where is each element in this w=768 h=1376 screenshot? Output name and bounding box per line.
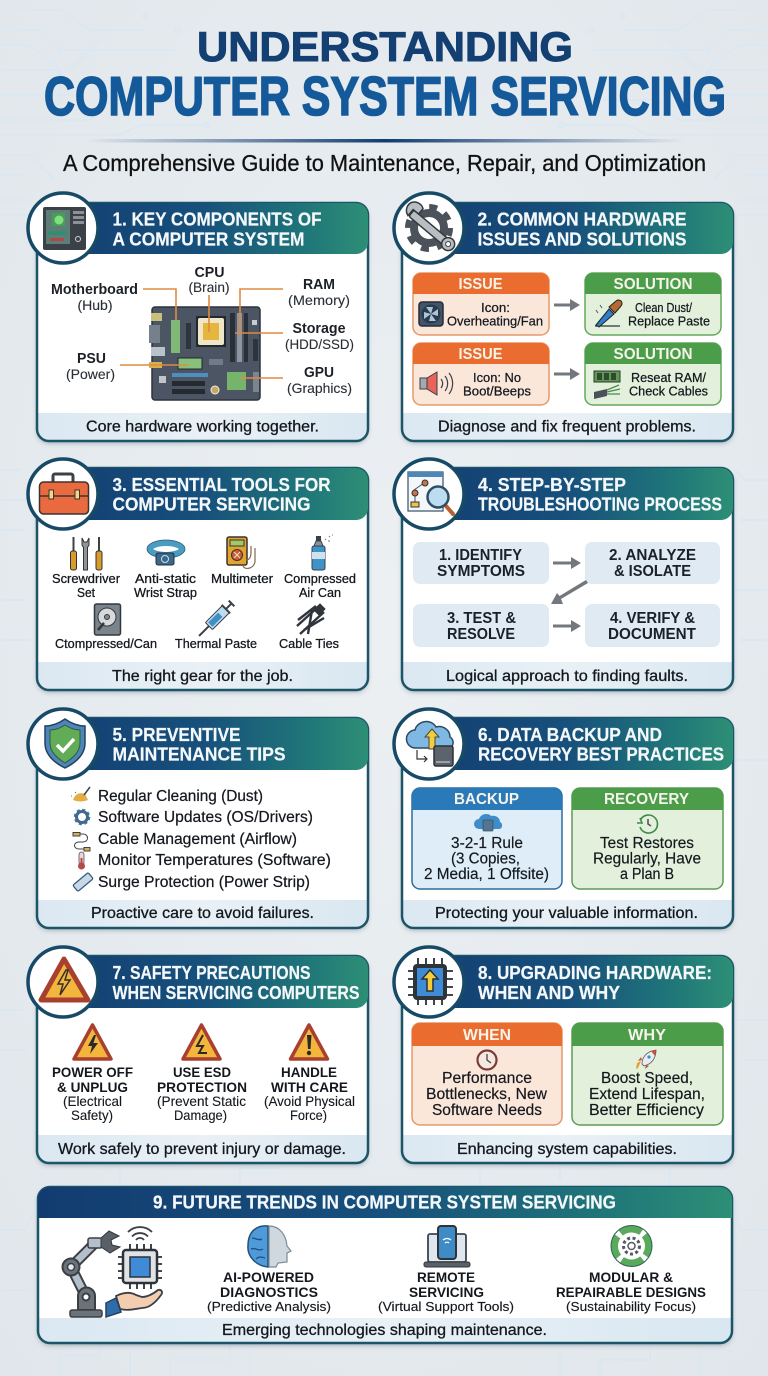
tool: hard drive: Ctompressed/Can (55, 637, 157, 651)
when box: Bottlenecks, New (426, 1086, 548, 1103)
component labels (51, 265, 354, 396)
icon: cloud and drive (394, 709, 464, 779)
why box: WHY (628, 1027, 666, 1044)
step 2 (585, 542, 720, 584)
safety 3 (264, 1025, 355, 1123)
header 4 (402, 468, 733, 520)
backup box: (3 Copies, (451, 850, 520, 868)
icon: broom (71, 787, 90, 802)
subtitle: A Comprehensive Guide to Maintenance, Repair, and Optimization (63, 150, 706, 176)
step 1 (413, 542, 549, 584)
header 2: ISSUES AND SOLUTIONS (478, 230, 686, 250)
chip (118, 1244, 162, 1289)
footer 3: The right gear for the job. (112, 668, 293, 685)
trend: modular designs (556, 1222, 706, 1314)
panel 7: safety (28, 947, 368, 1163)
backup box (412, 788, 562, 889)
arrow (551, 580, 588, 604)
icon: computer tower (28, 193, 98, 263)
recovery box: RECOVERY (604, 791, 689, 808)
recovery box: Test Restores (600, 835, 694, 852)
header 9 (38, 1187, 732, 1218)
trend: AI diagnostics: DIAGNOSTICS (220, 1285, 318, 1300)
trend: modular designs: MODULAR & (589, 1270, 673, 1285)
issue 1: ISSUE (458, 276, 503, 293)
component labels: RAM (303, 277, 335, 293)
tool: screwdrivers (52, 537, 120, 600)
trend: remote servicing: REMOTE (417, 1270, 475, 1285)
header 4: TROUBLESHOOTING PROCESS (478, 494, 722, 514)
title (44, 23, 726, 127)
when box: Performance (442, 1070, 532, 1087)
tool: thermal paste syringe: Thermal Paste (175, 637, 257, 651)
issue 1: Overheating/Fan (447, 314, 543, 328)
tip list: Surge Protection (Power Strip) (98, 874, 310, 891)
safety 2: (Prevent Static (157, 1093, 246, 1109)
panel 5: preventive maintenance (28, 709, 368, 928)
header 2: 2. COMMON HARDWARE (478, 210, 686, 230)
tip list: Monitor Temperatures (Software) (98, 852, 331, 869)
safety 1: & UNPLUG (57, 1079, 128, 1095)
wifi arcs (128, 1227, 152, 1240)
component labels: (Brain) (188, 279, 230, 295)
icon: RAM and cable (594, 371, 620, 399)
header 4: 4. STEP-BY-STEP (478, 475, 626, 495)
trend: modular designs: (Sustainability Focus) (566, 1299, 696, 1314)
panel 4: troubleshooting (394, 459, 733, 690)
icon: rocket (636, 1050, 656, 1069)
icon: cloud (474, 814, 502, 831)
tool: wrist strap: Anti-static (135, 572, 196, 586)
icon: speaker (420, 372, 453, 395)
solution 1: Replace Paste (628, 314, 710, 328)
safety 2: USE ESD (173, 1064, 231, 1080)
header 3: 3. ESSENTIAL TOOLS FOR (112, 475, 330, 495)
tool: air can: Compressed (284, 572, 356, 586)
header 5 (37, 718, 368, 770)
recovery box: Regularly, Have (593, 850, 701, 868)
header 9: 9. FUTURE TRENDS IN COMPUTER SYSTEM SERVICING (153, 1192, 616, 1212)
trend: AI diagnostics (207, 1226, 331, 1314)
component labels: CPU (194, 265, 224, 281)
issue 2: Icon: No (473, 370, 521, 385)
step 3: RESOLVE (447, 626, 515, 643)
component labels: (Power) (66, 366, 115, 382)
step 4 (585, 604, 720, 647)
tip list: Regular Cleaning (Dust) (98, 788, 263, 805)
component labels: GPU (304, 365, 334, 381)
icon: cables (73, 832, 90, 851)
tip list: Cable Management (Airflow) (98, 831, 297, 848)
arrow (553, 557, 581, 569)
icon: fan (419, 302, 443, 326)
header 8: 8. UPGRADING HARDWARE: (478, 963, 712, 983)
tool: screwdrivers: Screwdriver (52, 572, 120, 586)
header 3: COMPUTER SERVICING (112, 494, 310, 514)
solution 2: SOLUTION (614, 346, 692, 363)
issue 1 (413, 273, 549, 335)
hand (106, 1290, 162, 1317)
component labels: Storage (292, 321, 346, 337)
icon: gear and wrench (394, 193, 464, 263)
arrow (554, 299, 580, 311)
safety 3: Force) (290, 1107, 327, 1123)
header 8 (402, 956, 733, 1008)
footer 4: Logical approach to finding faults. (446, 668, 688, 685)
header 1: A COMPUTER SYSTEM (112, 230, 304, 250)
issue 2: Boot/Beeps (463, 384, 531, 398)
icon: flowchart and magnifier (394, 459, 464, 529)
tool: multimeter: Multimeter (211, 572, 273, 586)
tool: wrist strap: Wrist Strap (134, 586, 197, 600)
step 1: 1. IDENTIFY (439, 547, 523, 564)
footer 8: Enhancing system capabilities. (457, 1141, 677, 1158)
solution 2 (585, 343, 721, 405)
safety 2 (157, 1025, 247, 1123)
when box (412, 1023, 562, 1125)
recovery box (572, 788, 723, 889)
issue 2 (413, 343, 549, 405)
issue 2: ISSUE (458, 346, 503, 363)
safety 3: HANDLE (281, 1064, 337, 1080)
header 2 (402, 203, 733, 254)
header 5: 5. PREVENTIVE (112, 725, 240, 745)
recovery box: a Plan B (620, 866, 674, 883)
footer 7: Work safely to prevent injury or damage. (58, 1141, 346, 1158)
header 7: 7. SAFETY PRECAUTIONS (112, 963, 310, 983)
arrow (554, 368, 580, 380)
icon: power strip (73, 873, 93, 891)
title: UNDERSTANDING (197, 23, 573, 70)
component labels: Motherboard (51, 282, 138, 298)
footer 2: Diagnose and fix frequent problems. (438, 418, 696, 436)
trend: remote servicing: (Virtual Support Tools) (378, 1299, 514, 1314)
trend: modular designs: REPAIRABLE DESIGNS (556, 1285, 706, 1300)
panel 9: future trends (38, 1187, 732, 1343)
arrow (553, 620, 581, 632)
header 6 (402, 718, 733, 770)
icon: thermometer (78, 852, 85, 870)
icon: pipette (595, 300, 622, 327)
tool: screwdrivers: Set (77, 586, 96, 600)
header 6: RECOVERY BEST PRACTICES (478, 744, 724, 764)
step 1: SYMPTOMS (437, 563, 525, 580)
solution 1 (585, 273, 721, 335)
tool: wrist strap (134, 540, 197, 600)
safety 2: PROTECTION (157, 1079, 247, 1095)
step 3 (413, 604, 549, 647)
safety 3: WITH CARE (271, 1079, 348, 1095)
component labels: (Graphics) (287, 380, 352, 396)
panel 8: upgrading (394, 947, 733, 1163)
header 5: MAINTENANCE TIPS (112, 744, 286, 764)
step 2: & ISOLATE (614, 563, 691, 580)
tool: cable ties (279, 605, 339, 651)
footer 6: Protecting your valuable information. (435, 905, 698, 922)
robot arm (62, 1231, 120, 1317)
why box: Better Efficiency (589, 1102, 704, 1119)
issue 1: Icon: (481, 300, 510, 315)
icon: chip with arrow (394, 947, 464, 1017)
icon: toolbox (28, 459, 98, 529)
safety 1: POWER OFF (52, 1064, 133, 1080)
backup box: 2 Media, 1 Offsite) (424, 866, 549, 883)
icon: laptop and phone (424, 1226, 470, 1267)
tool: multimeter (211, 537, 273, 586)
step 4: 4. VERIFY & (610, 610, 695, 627)
title divider (85, 139, 685, 142)
step 3: 3. TEST & (447, 610, 516, 627)
safety 1: Safety) (71, 1107, 113, 1123)
tip list (71, 787, 331, 891)
tool: cable ties: Cable Ties (279, 637, 339, 651)
when box: Software Needs (432, 1102, 542, 1119)
solution 2: Reseat RAM/ (631, 370, 706, 385)
safety 3: (Avoid Physical (264, 1093, 355, 1109)
header 8: WHEN AND WHY (478, 983, 620, 1003)
trend: AI diagnostics: AI-POWERED (223, 1270, 314, 1285)
safety 2: Damage) (174, 1107, 227, 1123)
panel 1: key components (28, 193, 368, 441)
backup box: 3-2-1 Rule (451, 835, 523, 852)
component labels: PSU (77, 351, 106, 367)
motherboard diagram (120, 289, 283, 400)
header 6: 6. DATA BACKUP AND (478, 725, 662, 745)
trend: remote servicing: SERVICING (409, 1285, 484, 1300)
solution 1: Clean Dust/ (635, 300, 692, 315)
icon: restore (637, 815, 657, 833)
why box (572, 1023, 723, 1125)
illustration: robot arm, chip and hand (62, 1227, 162, 1317)
solution 1: SOLUTION (614, 276, 692, 293)
why box: Boost Speed, (601, 1070, 693, 1087)
icon: settings gear (75, 810, 89, 824)
component labels: (Hub) (78, 297, 112, 313)
header 3 (37, 468, 368, 520)
panel 6: data backup (394, 709, 733, 928)
icon: clock (478, 1050, 496, 1070)
header 7: WHEN SERVICING COMPUTERS (112, 983, 360, 1003)
tool: thermal paste syringe (175, 599, 257, 651)
trend: AI diagnostics: (Predictive Analysis) (207, 1299, 331, 1314)
tool: hard drive (55, 604, 157, 651)
trend: remote servicing (378, 1226, 514, 1314)
icon: modular ring (608, 1222, 655, 1270)
header 1 (37, 203, 368, 254)
header 1: 1. KEY COMPONENTS OF (112, 210, 322, 230)
footer 1: Core hardware working together. (86, 418, 319, 436)
component labels: (HDD/SSD) (285, 336, 354, 352)
tip list: Software Updates (OS/Drivers) (98, 809, 313, 826)
safety 1 (52, 1025, 133, 1123)
component labels: (Memory) (288, 292, 350, 308)
step 4: DOCUMENT (608, 626, 697, 643)
icon: shield (28, 709, 98, 779)
header 7 (37, 956, 368, 1008)
why box: Extend Lifespan, (589, 1086, 705, 1103)
panel 2: hardware issues (394, 193, 733, 441)
when box: WHEN (463, 1027, 511, 1044)
icon: brain and head (248, 1226, 291, 1267)
tool: air can: Air Can (299, 586, 341, 600)
footer 9: Emerging technologies shaping maintenance. (222, 1322, 547, 1339)
icon: warning triangle (28, 947, 98, 1017)
solution 2: Check Cables (629, 384, 708, 398)
tool: air can (284, 535, 356, 600)
backup box: BACKUP (454, 791, 519, 808)
panel 3: tools (28, 459, 368, 690)
safety 1: (Electrical (63, 1093, 122, 1109)
footer 5: Proactive care to avoid failures. (91, 905, 314, 922)
step 2: 2. ANALYZE (609, 547, 696, 564)
